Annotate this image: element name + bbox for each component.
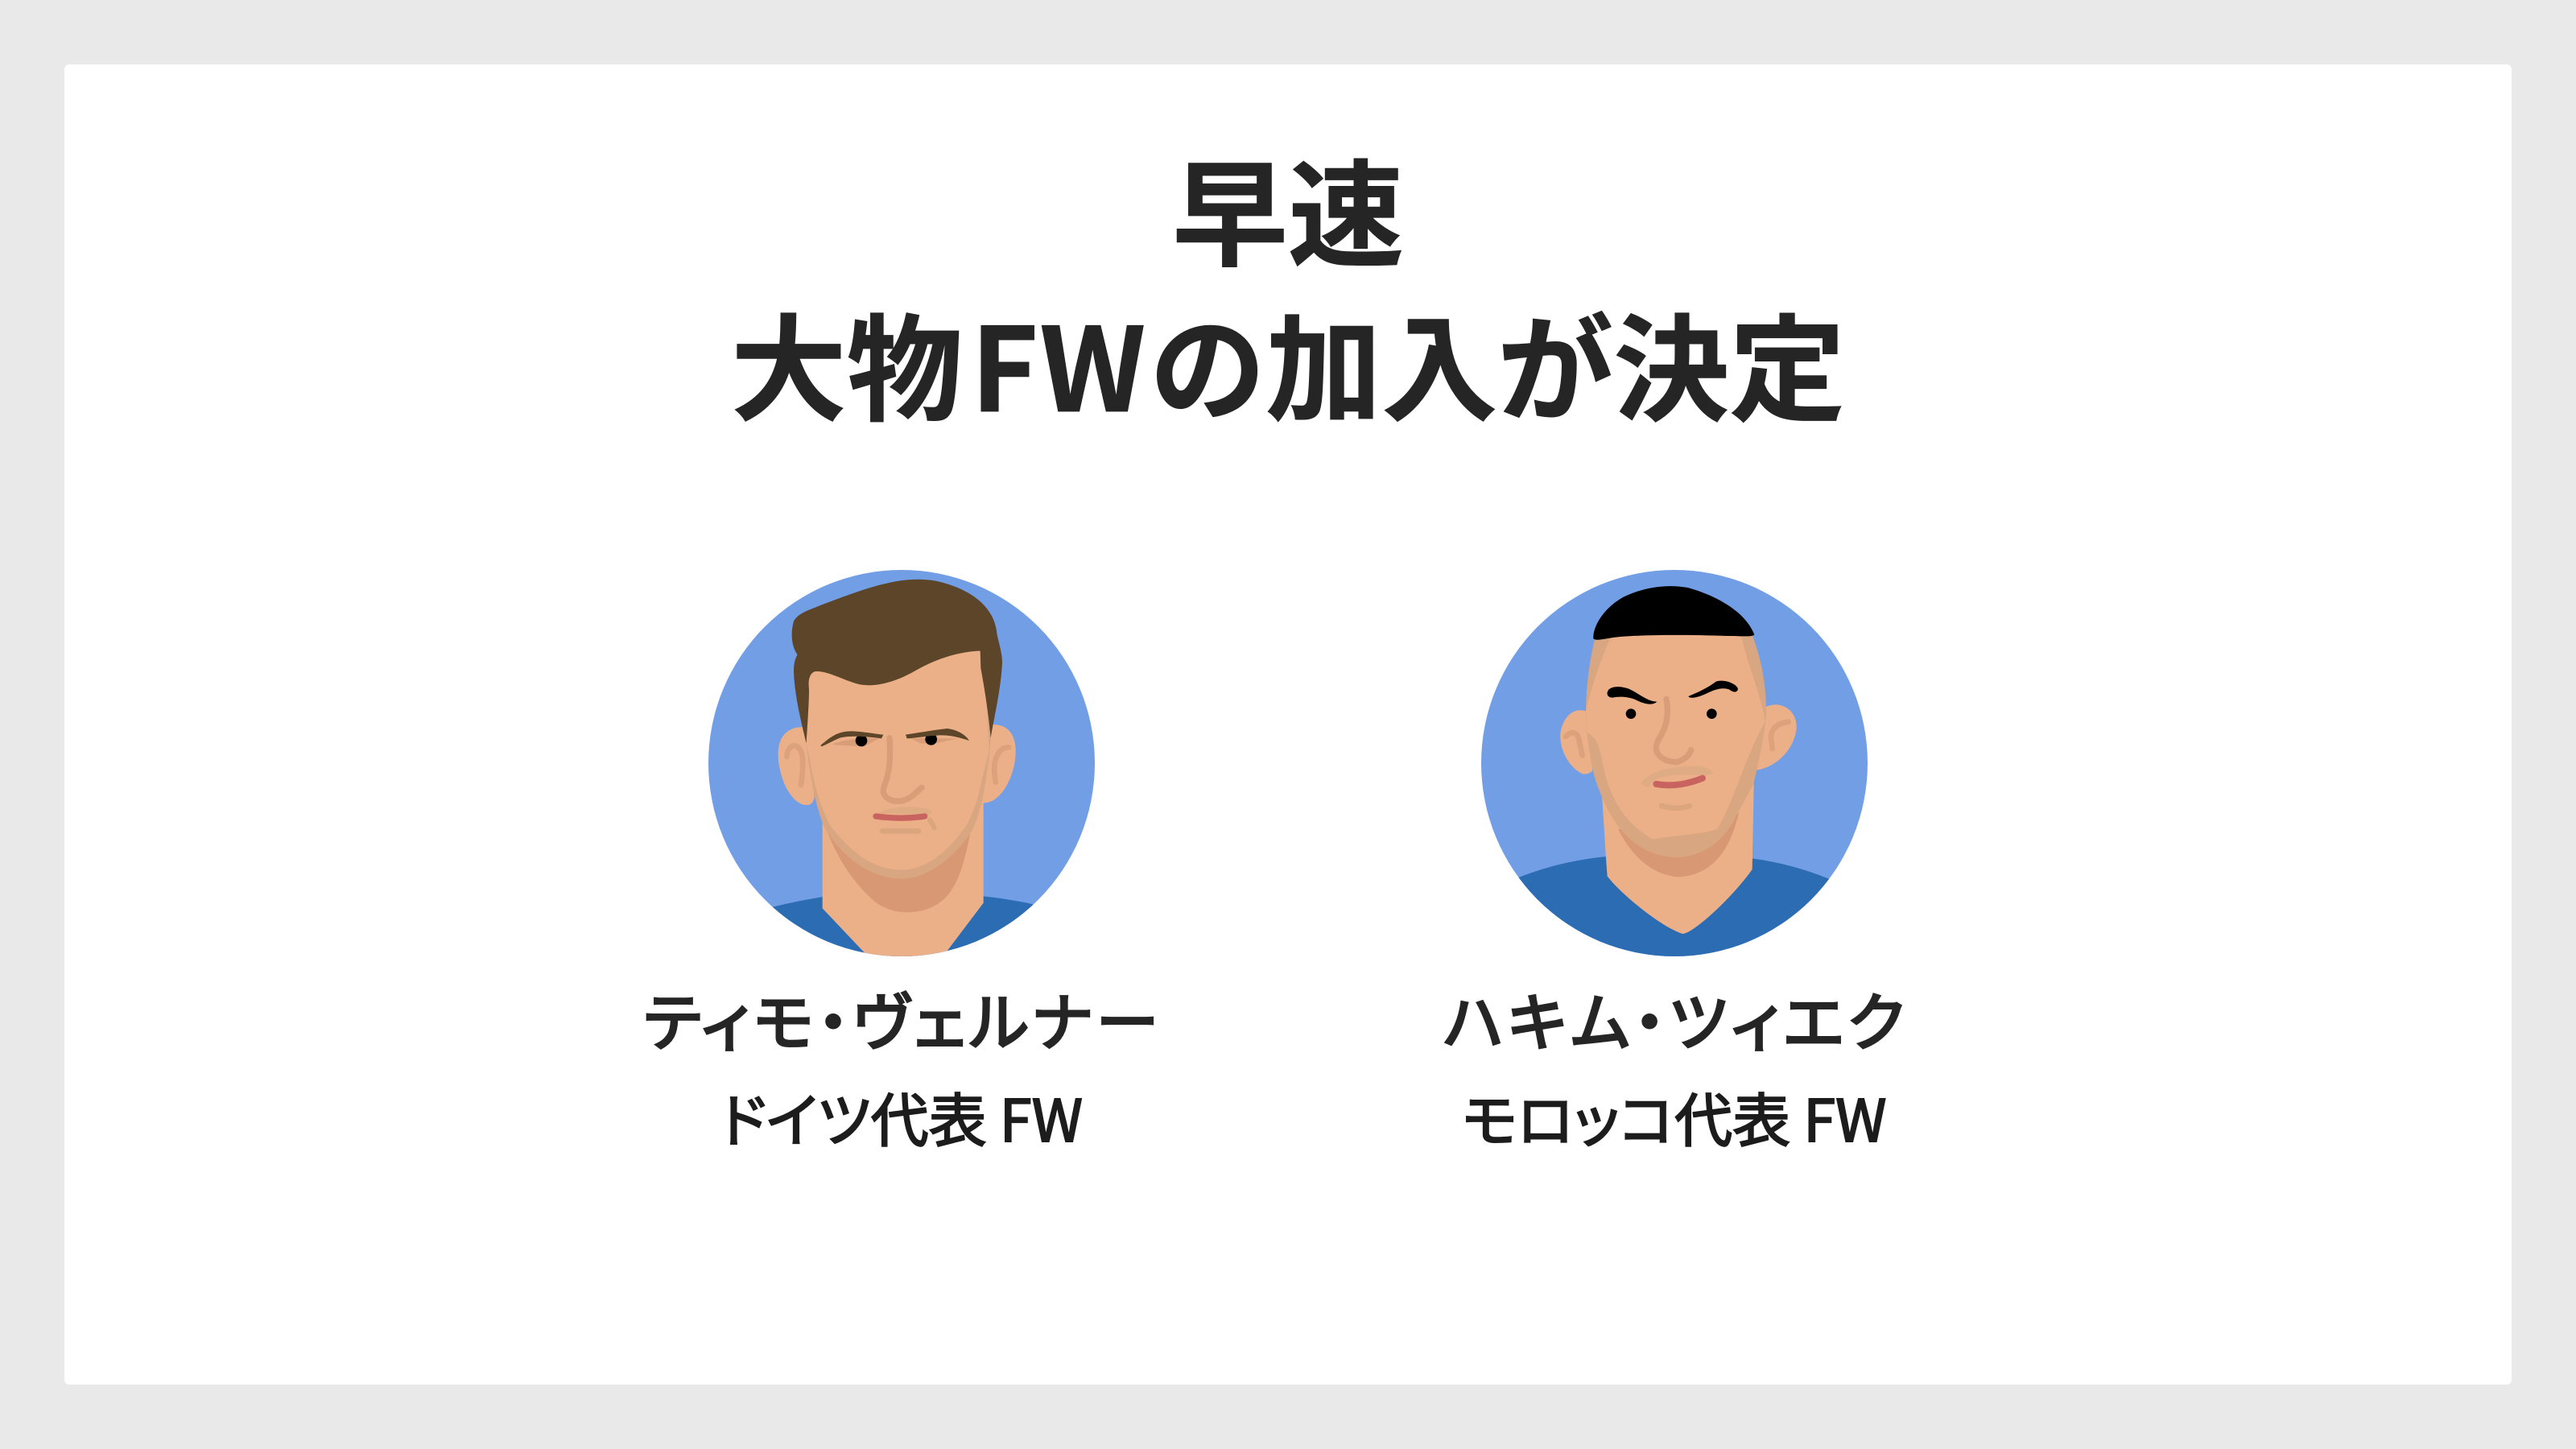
player name: Hakim Ziyech: ハキム・ツィエク — [1444, 973, 1908, 1063]
player role: Morocco FW: モロッコ代表 FW — [1462, 1074, 1887, 1158]
title — [731, 123, 1845, 445]
icon: portrait of Timo Werner — [708, 570, 1095, 956]
icon: portrait of Hakim Ziyech — [1481, 570, 1868, 956]
player name: Timo Werner: ティモ・ヴェルナー — [644, 973, 1162, 1063]
player role: Germany FW: ドイツ代表 FW — [720, 1074, 1083, 1158]
title: 大物FWの加入が決定 — [731, 278, 1845, 445]
title: 早速 — [1172, 123, 1404, 291]
